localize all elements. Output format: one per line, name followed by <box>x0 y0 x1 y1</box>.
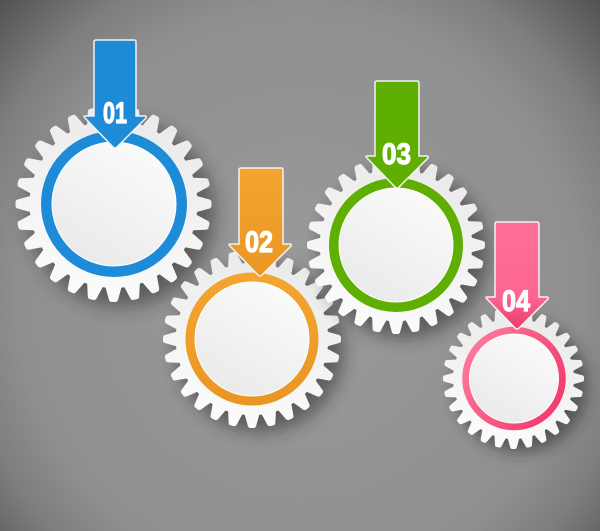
number 04: 04 <box>502 285 530 318</box>
gear 3 green <box>305 154 493 343</box>
gear 2 orange <box>161 248 349 437</box>
arrow 1 with number 01 <box>84 40 146 148</box>
number 03: 03 <box>382 138 411 171</box>
arrow 2 with number 02 <box>229 168 291 276</box>
number 01: 01 <box>103 97 127 130</box>
number 02: 02 <box>245 226 273 259</box>
gear 4 pink <box>442 306 592 457</box>
gear 1 blue <box>14 104 220 312</box>
arrow 4 with number 04 <box>486 222 548 329</box>
arrow 3 with number 03 <box>366 81 428 188</box>
